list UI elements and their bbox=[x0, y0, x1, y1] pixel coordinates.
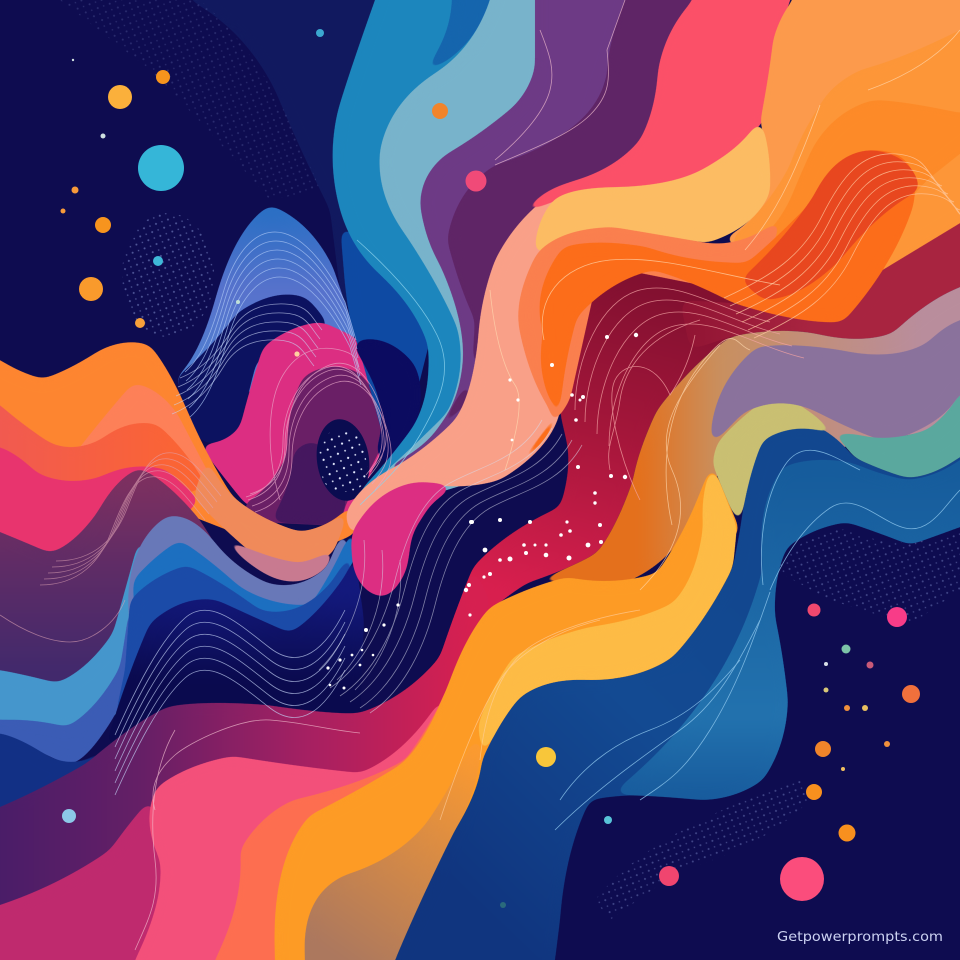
burnt orange and mauve band bbox=[420, 275, 960, 730]
blue mountain wave bbox=[176, 205, 360, 444]
deep orange wave bbox=[495, 150, 920, 484]
lower left purple band bbox=[0, 567, 490, 960]
top dotted fields bbox=[60, 0, 320, 337]
deep blue lower wave bbox=[385, 423, 960, 960]
orange strip bbox=[500, 215, 785, 480]
teal band bbox=[820, 385, 960, 478]
orange lower band bbox=[274, 463, 740, 960]
crimson band bbox=[357, 130, 960, 720]
blue flowing bands bbox=[332, 0, 560, 520]
top right orange bbox=[720, 0, 960, 320]
pink band bbox=[515, 0, 800, 218]
planets lower right bbox=[62, 604, 920, 908]
white speckles bbox=[236, 300, 638, 690]
brown gradient band bbox=[304, 735, 482, 960]
navy centre bbox=[105, 540, 364, 748]
coral lower band bbox=[205, 680, 470, 960]
salmon band bbox=[345, 182, 600, 540]
yellow band bbox=[535, 118, 770, 258]
lower dotted fields bbox=[595, 530, 960, 920]
planets top left bbox=[60, 29, 486, 328]
yellow-green band bbox=[712, 392, 845, 530]
purple bands bbox=[380, 0, 720, 480]
magenta blob bbox=[351, 482, 457, 597]
purple grey band bbox=[710, 310, 960, 447]
left wave stack bbox=[0, 342, 358, 850]
pink lower band bbox=[125, 700, 460, 960]
watermark: Getpowerprompts.com bbox=[777, 930, 943, 945]
magenta band bbox=[0, 800, 200, 960]
magenta inner wave bbox=[198, 322, 394, 526]
top navy wave bbox=[185, 0, 400, 330]
yellow lower band bbox=[478, 463, 737, 760]
